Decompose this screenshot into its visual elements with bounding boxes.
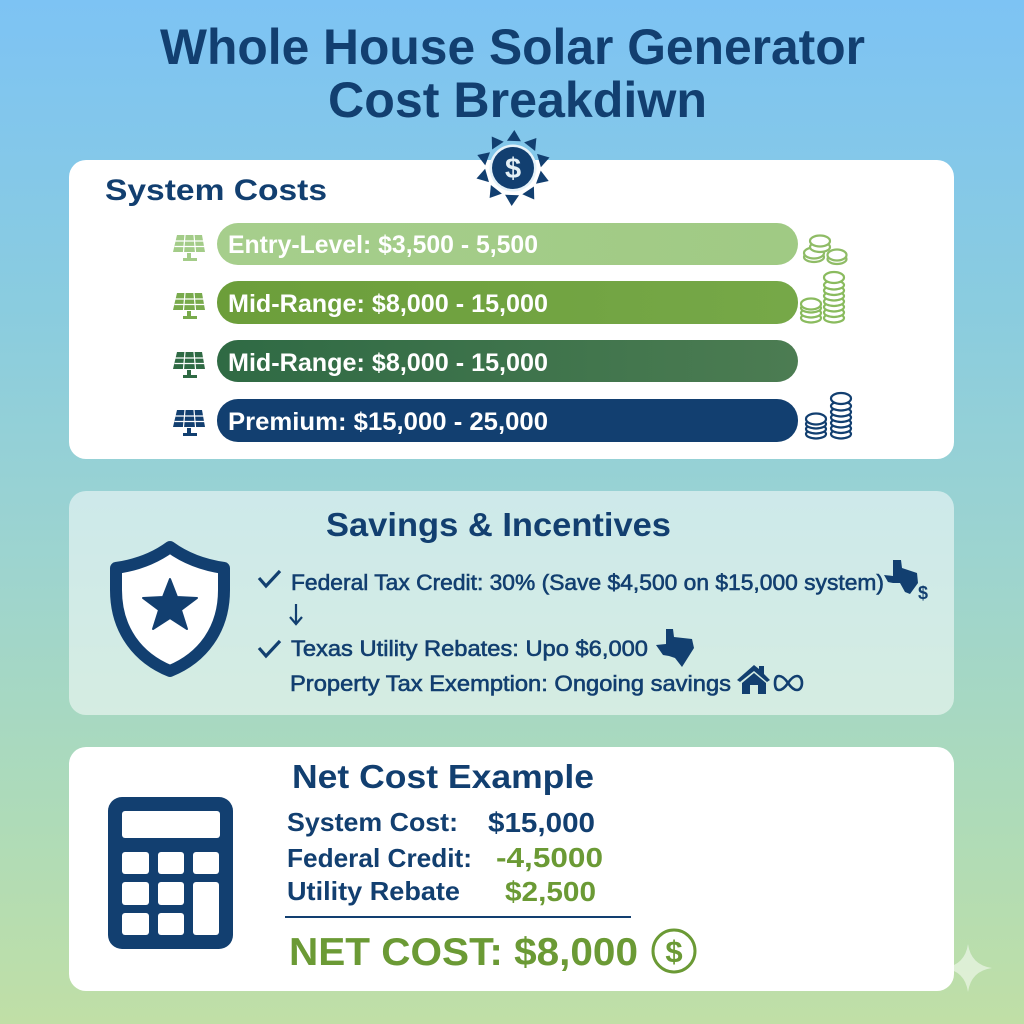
- row: federal credit: Federal Credit:: [287, 843, 472, 873]
- row: federal credit: [287, 842, 603, 873]
- text: federal tax credit: Federal Tax Credit: 30% (Save $4,500 on $15,000 system): [291, 570, 884, 595]
- icon: dollar circle: $: [665, 934, 683, 969]
- row: utility rebate: $2,500: [505, 876, 596, 907]
- icon: sun with dollar: $: [505, 153, 521, 185]
- total: net cost: NET COST: $8,000: [289, 931, 638, 974]
- panel: system costs: [69, 160, 954, 459]
- heading: savings and incentives: Savings & Incentives: [326, 506, 671, 543]
- text: texas utility rebates: Texas Utility Rebates: Upo $6,000: [291, 636, 648, 661]
- title: [160, 19, 865, 128]
- icon: solar panel green: [173, 293, 205, 319]
- icon: sun with dollar: [475, 130, 551, 206]
- bar: mid-range second: Mid-Range: $8,000 - 15,000: [228, 349, 548, 377]
- icon: solar panel light green: [173, 235, 205, 261]
- icon: texas and dollar: $: [918, 583, 928, 603]
- title: Cost Breakdiwn: [328, 72, 707, 128]
- icon: down arrow: [290, 604, 302, 624]
- icon: solar panel navy: [173, 410, 205, 436]
- panel: net cost example: [69, 747, 954, 991]
- text: property tax exemption: Property Tax Exemption: Ongoing savings: [290, 671, 731, 696]
- row: federal credit: -4,5000: [496, 842, 603, 873]
- heading: system costs: System Costs: [105, 174, 327, 207]
- icon: coins premium: [806, 393, 851, 438]
- icon: infinity: [775, 676, 802, 690]
- icon: texas and dollar: [884, 560, 928, 603]
- panel: savings and incentives: [69, 491, 954, 715]
- bar: entry-level: [217, 223, 798, 265]
- icon: coins entry-level: [804, 236, 846, 264]
- row: system cost: [287, 807, 595, 838]
- icon: calculator: [108, 797, 233, 949]
- bar: mid-range: [217, 281, 798, 324]
- bar: premium: Premium: $15,000 - 25,000: [228, 408, 548, 436]
- row: utility rebate: [287, 876, 596, 907]
- icon: coins mid-range: [801, 272, 844, 322]
- row: system cost: System Cost:: [287, 807, 458, 837]
- bar: entry-level: Entry-Level: $3,500 - 5,500: [228, 231, 538, 259]
- icon: shield with star: [116, 547, 224, 671]
- bar: premium: [217, 399, 798, 442]
- row: system cost: $15,000: [488, 807, 595, 838]
- icon: check texas: [259, 641, 280, 656]
- row: utility rebate: Utility Rebate: [287, 876, 460, 906]
- icon: dollar circle: [653, 930, 695, 972]
- icon: house: [737, 665, 770, 694]
- title: Whole House Solar Generator: [160, 19, 865, 75]
- bar: mid-range second: [217, 340, 798, 382]
- bar: mid-range: Mid-Range: $8,000 - 15,000: [228, 290, 548, 318]
- icon: texas: [656, 629, 694, 667]
- icon: solar panel dark green: [173, 352, 205, 378]
- icon: sparkle: [944, 944, 992, 992]
- heading: net cost example: Net Cost Example: [292, 758, 594, 795]
- icon: check federal: [259, 571, 280, 586]
